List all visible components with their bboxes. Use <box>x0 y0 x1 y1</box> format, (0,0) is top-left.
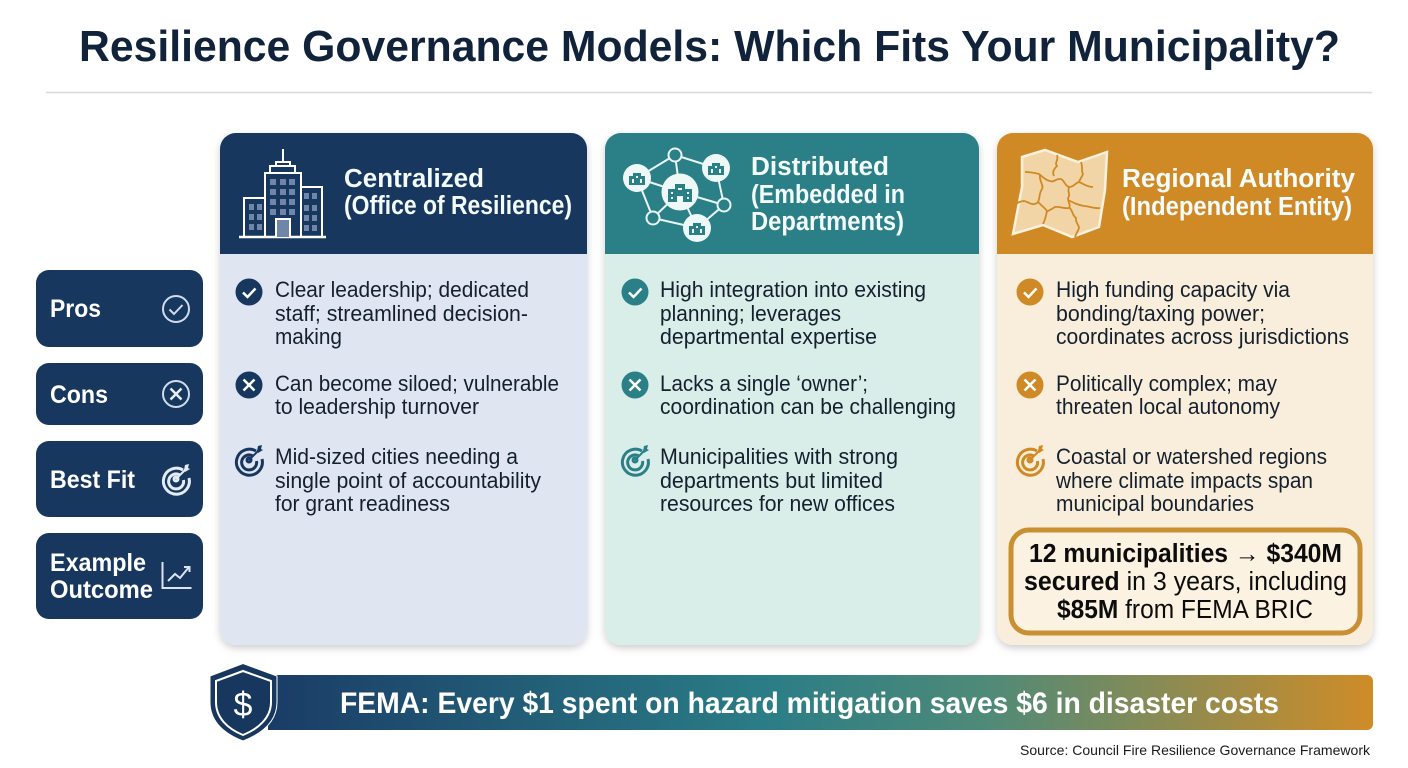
heading: distributed: (Embedded in <box>751 181 905 209</box>
pros: regional authority: bonding/taxing power; <box>1056 301 1265 326</box>
pros: regional authority: coordinates across jurisdictions <box>1056 324 1349 349</box>
label: pros: Pros <box>50 295 101 323</box>
best fit: distributed: departments but limited <box>660 468 883 493</box>
source note: Source: Council Fire Resilience Governance Framework <box>1020 742 1371 758</box>
best fit: regional authority: where climate impacts span <box>1055 468 1313 493</box>
pros: regional authority <box>1016 277 1349 349</box>
cons: centralized: to leadership turnover <box>275 394 479 419</box>
icon: office buildings <box>239 149 326 237</box>
pros: centralized: making <box>275 324 342 349</box>
icon: shield with dollar <box>210 664 277 741</box>
best fit: distributed: Municipalities with strong <box>660 444 898 469</box>
panel: centralized <box>220 133 587 645</box>
icon: regional map <box>1013 150 1107 237</box>
best fit: distributed: resources for new offices <box>660 491 895 516</box>
row labels <box>36 270 203 619</box>
heading: regional authority <box>1122 165 1356 221</box>
pros: centralized: Clear leadership; dedicated <box>275 277 529 302</box>
cons: distributed <box>622 371 956 419</box>
pros: centralized <box>236 277 529 349</box>
cons: centralized <box>236 371 559 419</box>
best fit: centralized: for grant readiness <box>275 491 450 516</box>
heading: centralized: Centralized <box>344 165 484 193</box>
cons: regional authority <box>1016 371 1281 419</box>
pros: regional authority: High funding capacity via <box>1056 277 1290 302</box>
callout: example outcome: secured in 3 years, including <box>1024 568 1347 596</box>
label: pros <box>36 270 203 347</box>
best fit: centralized: single point of accountability <box>275 468 542 493</box>
label: example outcome <box>36 533 203 619</box>
label: example outcome: Outcome <box>50 576 153 604</box>
label: best fit: Best Fit <box>50 466 136 494</box>
best fit: regional authority: Coastal or watershed regions <box>1056 444 1327 469</box>
icon: network of buildings <box>623 148 730 242</box>
callout: example outcome: 12 municipalities → $340M <box>1029 540 1342 568</box>
pros: distributed: High integration into existing <box>660 277 926 302</box>
cons: distributed: coordination can be challenging <box>660 394 956 419</box>
heading: distributed: Departments) <box>751 208 904 236</box>
cons: centralized: Can become siloed; vulnerable <box>275 371 559 396</box>
heading: regional authority: (Independent Entity) <box>1122 193 1352 221</box>
cons: regional authority: Politically complex; may <box>1056 371 1278 396</box>
banner: FEMA statistic <box>210 664 1373 741</box>
pros: distributed: planning; leverages <box>660 301 841 326</box>
label: cons <box>36 363 203 425</box>
panel: regional authority <box>997 133 1373 645</box>
header: distributed <box>605 133 979 254</box>
icon: shield with dollar: $ <box>234 686 253 724</box>
pros: distributed: departmental expertise <box>660 324 877 349</box>
label: example outcome: Example <box>50 549 146 577</box>
best fit: regional authority <box>1017 444 1327 516</box>
heading: centralized: (Office of Resilience) <box>344 192 572 220</box>
best fit: centralized <box>236 444 542 516</box>
panel: distributed <box>605 133 979 645</box>
header: regional authority <box>997 133 1373 254</box>
callout: example outcome <box>1011 530 1360 633</box>
pros: distributed <box>622 277 926 349</box>
label: cons: Cons <box>50 381 108 409</box>
cons: regional authority: threaten local autonomy <box>1056 394 1281 419</box>
heading: distributed <box>751 153 905 236</box>
heading: centralized <box>344 165 572 220</box>
cons: distributed: Lacks a single ‘owner’; <box>660 371 868 396</box>
heading: distributed: Distributed <box>751 153 889 181</box>
label: best fit <box>36 441 203 517</box>
best fit: regional authority: municipal boundaries <box>1056 491 1254 516</box>
best fit: centralized: Mid-sized cities needing a <box>275 444 518 469</box>
header: centralized <box>220 133 587 254</box>
callout: example outcome: $85M from FEMA BRIC <box>1057 596 1313 624</box>
title: Resilience Governance Models: Which Fits Your Municipality? <box>79 22 1340 71</box>
pros: centralized: staff; streamlined decision- <box>275 301 528 326</box>
banner: FEMA statistic: FEMA: Every $1 spent on hazard mitigation saves $6 in disaster costs <box>340 687 1279 720</box>
heading: regional authority: Regional Authority <box>1122 165 1356 193</box>
best fit: distributed <box>622 444 898 516</box>
